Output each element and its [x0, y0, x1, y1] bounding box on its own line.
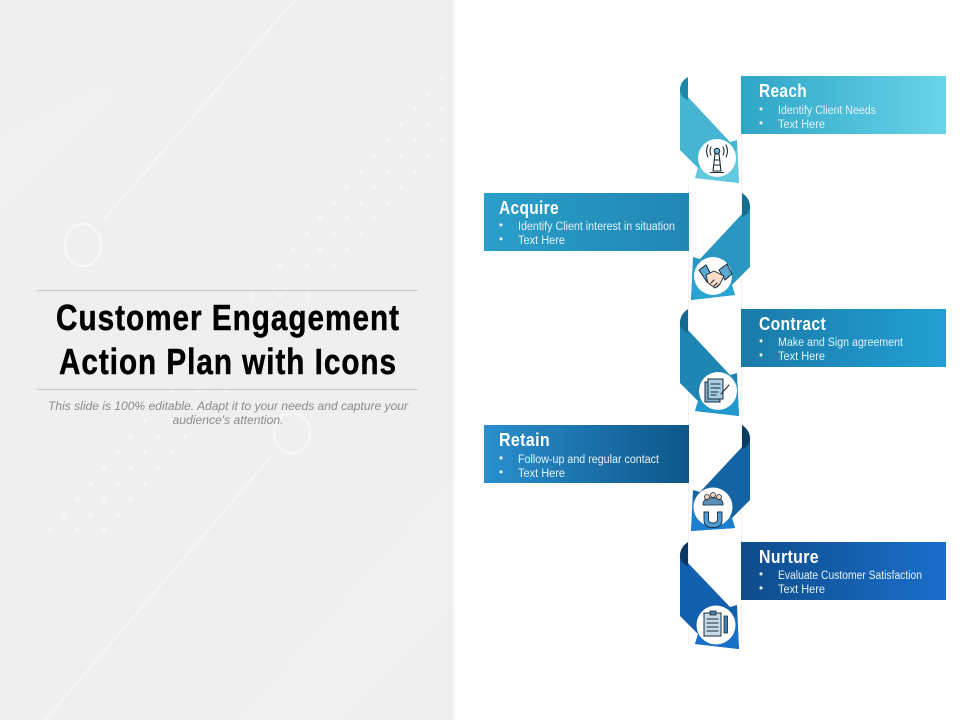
label box: Acquire: Text Here — [518, 235, 565, 247]
ribbon arrow — [680, 542, 739, 649]
label box: Acquire: Acquire — [499, 197, 559, 218]
label box: Nurture: • — [759, 583, 763, 595]
label box: Reach: • — [759, 118, 763, 130]
icon: people and magnet — [694, 488, 732, 528]
ribbon arrow — [691, 193, 750, 300]
label box: Retain — [484, 425, 689, 483]
step 4: Retain — [484, 425, 750, 531]
label box: Retain: • — [499, 453, 503, 465]
label box: Contract: Make and Sign agreement — [778, 337, 904, 349]
step 3: Contract — [680, 309, 946, 416]
subtitle: This slide is 100% editable. Adapt it to your needs and capture your — [48, 399, 409, 413]
label box: Acquire: • — [499, 220, 503, 232]
label box: Contract: • — [759, 336, 763, 348]
label box: Retain: Follow-up and regular contact — [518, 454, 660, 466]
label box: Acquire: • — [499, 234, 503, 246]
label box: Reach — [741, 76, 946, 134]
icon: signal tower — [698, 139, 736, 177]
icon: handshake — [694, 257, 732, 295]
label box: Retain: Text Here — [518, 468, 565, 480]
label box: Contract: • — [759, 350, 763, 362]
label box: Retain: • — [499, 467, 503, 479]
label box: Contract: Text Here — [778, 351, 825, 363]
step 5: Nurture — [680, 542, 946, 649]
label box: Reach: Identify Client Needs — [778, 105, 876, 117]
label box: Nurture — [741, 542, 946, 600]
step 1: Reach — [680, 76, 946, 183]
title: Customer Engagement — [56, 297, 400, 338]
label box: Reach: Reach — [759, 80, 807, 101]
label box: Acquire: Identify Client interest in situation — [518, 221, 675, 233]
label box: Nurture: Text Here — [778, 584, 825, 596]
label box: Retain: Retain — [499, 429, 550, 450]
label box: Reach: • — [759, 104, 763, 116]
label box: Contract: Contract — [759, 313, 826, 334]
label box: Nurture: • — [759, 569, 763, 581]
step 2: Acquire — [484, 193, 750, 300]
background panel — [0, 0, 455, 720]
subtitle: audience's attention. — [172, 413, 284, 427]
label box: Reach: Text Here — [778, 119, 825, 131]
ribbon arrow — [691, 425, 750, 531]
subtitle — [48, 399, 409, 427]
label box: Nurture: Nurture — [759, 546, 819, 567]
label box: Nurture: Evaluate Customer Satisfaction — [778, 570, 922, 582]
label box: Acquire — [484, 193, 689, 251]
label box: Contract — [741, 309, 946, 367]
ribbon arrow — [680, 309, 739, 416]
ribbon arrow — [680, 77, 739, 183]
title second line: Action Plan with Icons — [59, 341, 397, 382]
center guide lines — [688, 135, 742, 645]
icon: clipboard and pencil — [696, 606, 736, 644]
icon: signed document — [699, 372, 737, 410]
